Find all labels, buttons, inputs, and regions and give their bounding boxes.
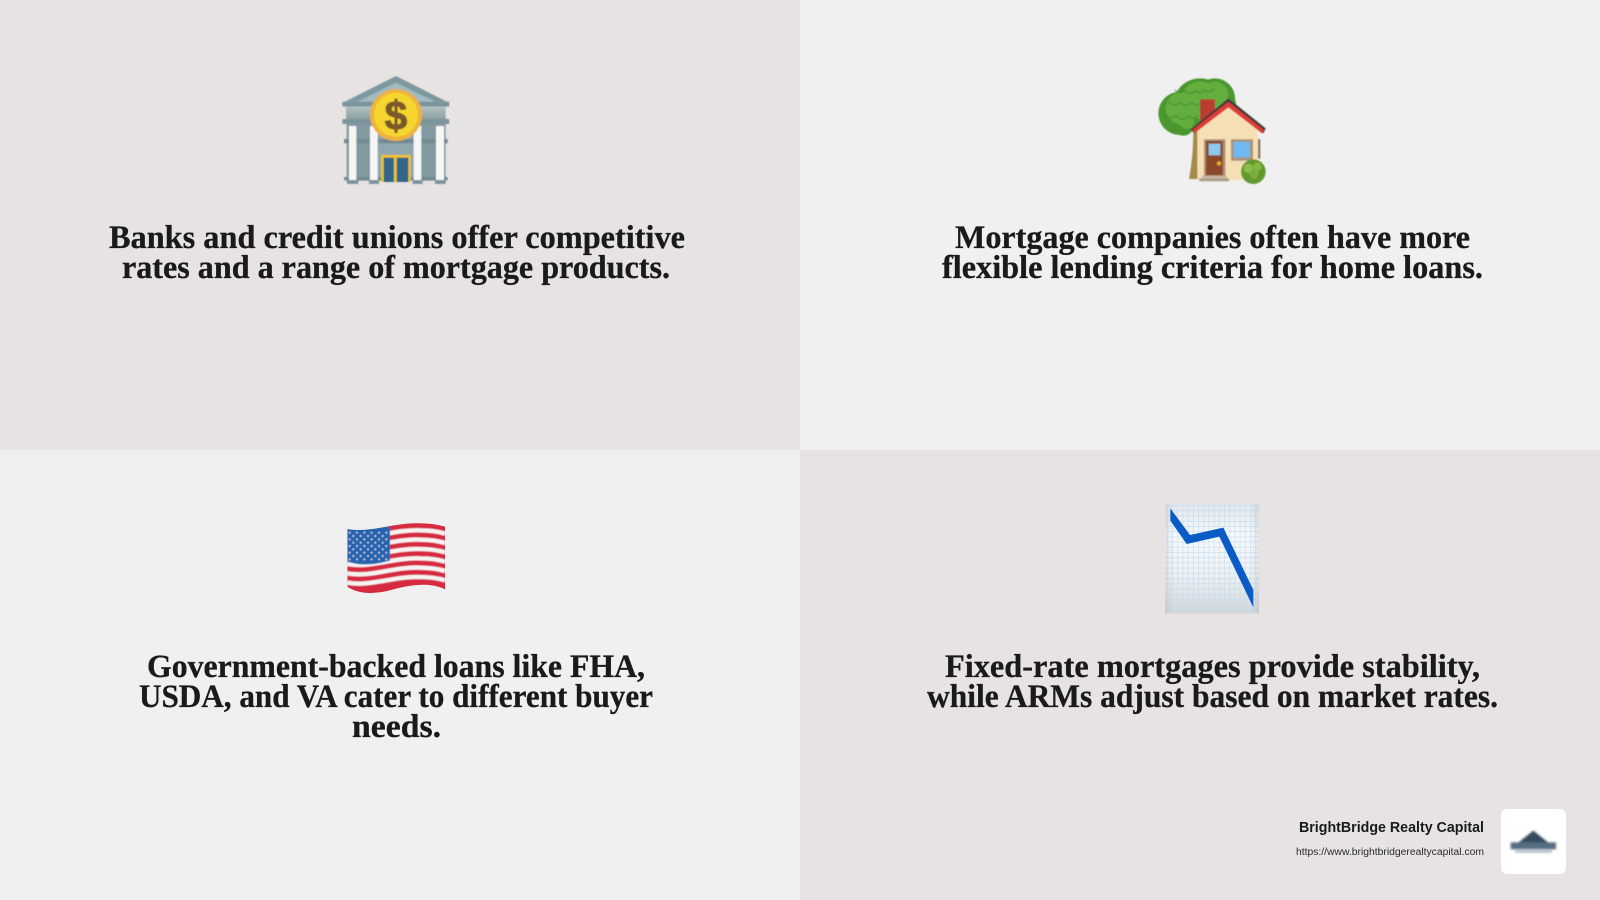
heading: mortgage companies text: flexible lending criteria for home loans. [942,250,1483,286]
heading: mortgage companies text [942,220,1483,286]
heading: mortgage companies text: Mortgage companies often have more [955,220,1470,256]
icon: bank with dollar coin [342,76,449,184]
panel: mortgage companies [800,0,1600,450]
heading: banks text: rates and a range of mortgage products. [122,250,670,286]
heading: government loans text: Government-backed loans like FHA, [147,649,645,685]
icon: bank with dollar coin: $ [385,92,408,138]
heading: banks text: Banks and credit unions offer competitive [109,220,685,256]
heading: government loans text: USDA, and VA cater to different buyer [139,679,653,715]
heading: government loans text [139,649,653,745]
panel: fixed-rate and ARMs [800,450,1600,900]
brand name: BrightBridge Realty Capital [1299,820,1484,836]
brand url: https://www.brightbridgerealtycapital.com [1296,847,1484,858]
panel: government-backed loans [140,523,652,738]
panel: banks and credit unions [0,0,800,450]
icon: house with tree [1158,78,1266,184]
heading: banks text [109,220,685,286]
heading: fixed-rate text: while ARMs adjust based on market rates. [927,679,1498,715]
brand footer [1296,809,1566,874]
brand logo [1501,809,1566,874]
icon: american flag [347,523,445,593]
heading: fixed-rate text [927,649,1498,715]
heading: fixed-rate text: Fixed-rate mortgages provide stability, [945,649,1480,685]
icon: chart decreasing [1165,503,1259,613]
heading: government loans text: needs. [352,709,441,745]
